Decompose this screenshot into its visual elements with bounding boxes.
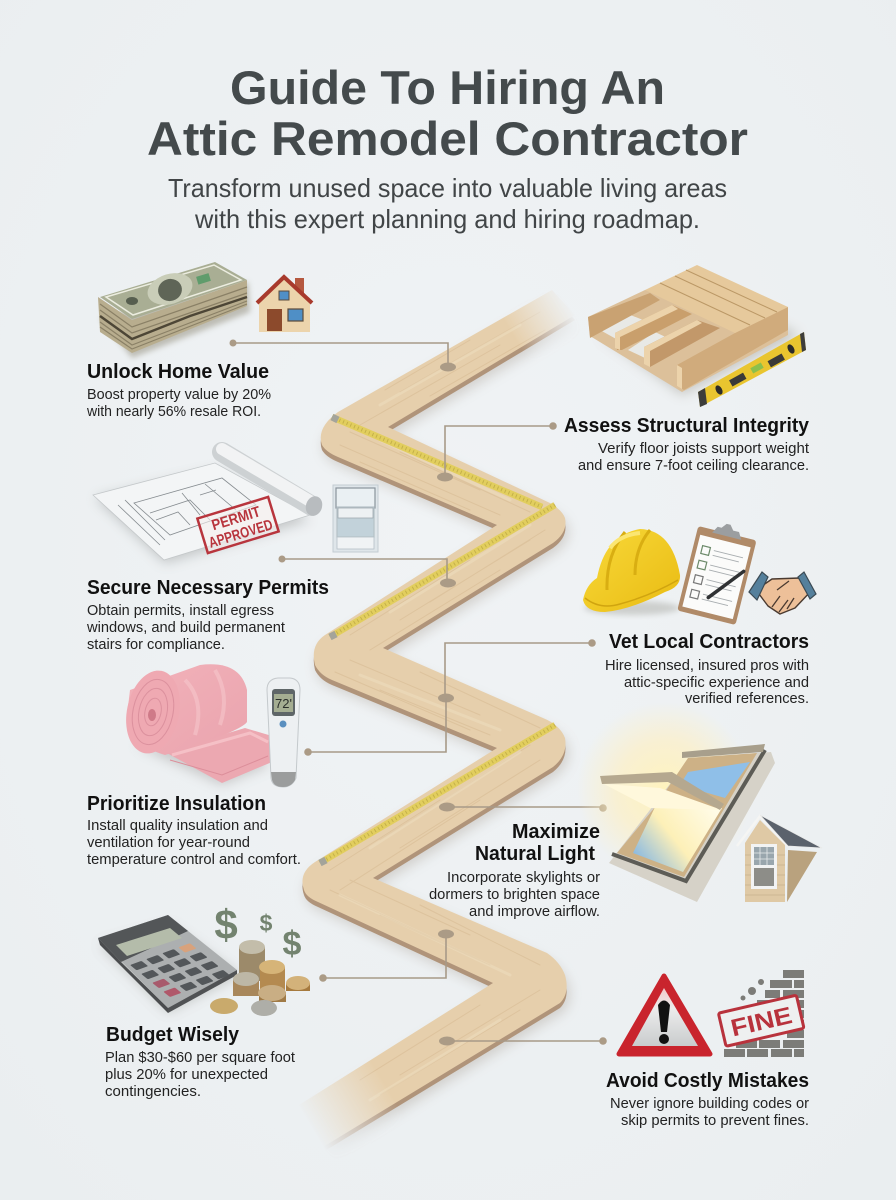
title: Attic Remodel Contractor [147, 112, 748, 165]
icon: fine stamp: FINE [728, 1002, 795, 1042]
connector: vet contractors [438, 639, 596, 702]
heading: Unlock Home Value [87, 361, 269, 383]
description: windows, and build permanent [86, 620, 285, 636]
icon: skylight with sun [577, 702, 775, 902]
description [605, 658, 809, 707]
icon: blueprint with stamp [93, 449, 325, 563]
heading: Avoid Costly Mistakes [606, 1070, 809, 1092]
icon: spirit level [698, 332, 806, 407]
panel: assess structural integrity [564, 265, 810, 474]
description [578, 441, 809, 474]
icon: clipboard [677, 517, 759, 625]
description: and improve airflow. [469, 904, 600, 920]
heading: Secure Necessary Permits [87, 577, 329, 599]
description: Plan $30-$60 per square foot [105, 1050, 295, 1066]
description: stairs for compliance. [87, 637, 225, 653]
connector: natural light [439, 802, 607, 812]
heading: Vet Local Contractors [609, 631, 809, 653]
description: temperature control and comfort. [87, 852, 301, 868]
panel: prioritize insulation [87, 664, 301, 868]
icon: stack of money [98, 262, 250, 358]
connector: unlock home value [230, 340, 456, 372]
icon: house [257, 277, 312, 332]
description [86, 387, 271, 420]
icon: floor joists and deck [588, 265, 800, 395]
description: plus 20% for unexpected [105, 1067, 268, 1083]
description: Boost property value by 20% [87, 387, 271, 403]
icon: handshake [749, 572, 816, 614]
description: Never ignore building codes or [610, 1096, 809, 1112]
subtitle: Transform unused space into valuable living areas [168, 173, 727, 203]
icon: blueprint with stamp: APPROVED [207, 516, 275, 552]
description: and ensure 7-foot ceiling clearance. [578, 458, 809, 474]
description: contingencies. [105, 1084, 201, 1100]
winding wooden path [280, 290, 578, 1156]
heading: Budget Wisely [106, 1024, 240, 1046]
subtitle: with this expert planning and hiring roadmap. [194, 204, 700, 234]
description: Obtain permits, install egress [87, 603, 274, 619]
description: verified references. [685, 691, 809, 707]
description [105, 1050, 295, 1100]
description: Hire licensed, insured pros with [605, 658, 809, 674]
title [147, 61, 748, 165]
panel: maximize natural light [429, 702, 822, 920]
icon: hard hat [583, 529, 680, 615]
icon: dormer [737, 815, 822, 902]
heading [475, 821, 600, 865]
connector: avoid mistakes [439, 1036, 607, 1046]
description: attic-specific experience and [624, 675, 809, 691]
connector: prioritize insulation [304, 698, 446, 756]
heading: Maximize [512, 821, 600, 843]
description: Install quality insulation and [87, 818, 268, 834]
icon: coin stacks [210, 940, 310, 1016]
description: with nearly 56% resale ROI. [86, 404, 261, 420]
icon: dollar signs: $ [214, 901, 238, 948]
icon: insulation roll [119, 664, 272, 785]
heading: Prioritize Insulation [87, 793, 266, 815]
description [429, 870, 600, 920]
connector: secure permits [278, 556, 456, 588]
title: Guide To Hiring An [230, 61, 665, 114]
description [86, 603, 285, 653]
panel: vet local contractors [583, 517, 816, 707]
description: Incorporate skylights or [447, 870, 600, 886]
description: skip permits to prevent fines. [621, 1113, 809, 1129]
panel: avoid costly mistakes [606, 970, 809, 1129]
connector: budget wisely [319, 930, 454, 982]
description: ventilation for year-round [87, 835, 250, 851]
icon: thermostat [267, 678, 300, 787]
heading: Natural Light [475, 843, 595, 865]
icon: dollar signs: $ [283, 925, 302, 963]
description [87, 818, 301, 868]
icon: egress window [333, 485, 378, 552]
panel: secure necessary permits [86, 449, 378, 653]
heading: Assess Structural Integrity [564, 415, 810, 437]
description [610, 1096, 809, 1129]
icon: brick wall [724, 970, 804, 1057]
description: Verify floor joists support weight [598, 441, 809, 457]
panel: budget wisely [98, 901, 310, 1100]
measuring tapes on path [320, 417, 555, 863]
panel: unlock home value [86, 262, 312, 420]
connector: assess structural integrity [437, 422, 557, 482]
icon: thermostat: 72' [275, 696, 292, 711]
icon: blueprint with stamp: PERMIT [210, 503, 262, 534]
description: dormers to brighten space [429, 887, 600, 903]
icon: dollar signs [214, 901, 302, 963]
icon: dollar signs: $ [260, 910, 273, 936]
icon: calculator [98, 915, 240, 1013]
subtitle [168, 173, 727, 234]
icon: warning triangle [619, 976, 710, 1054]
icon: fine stamp [718, 995, 804, 1046]
